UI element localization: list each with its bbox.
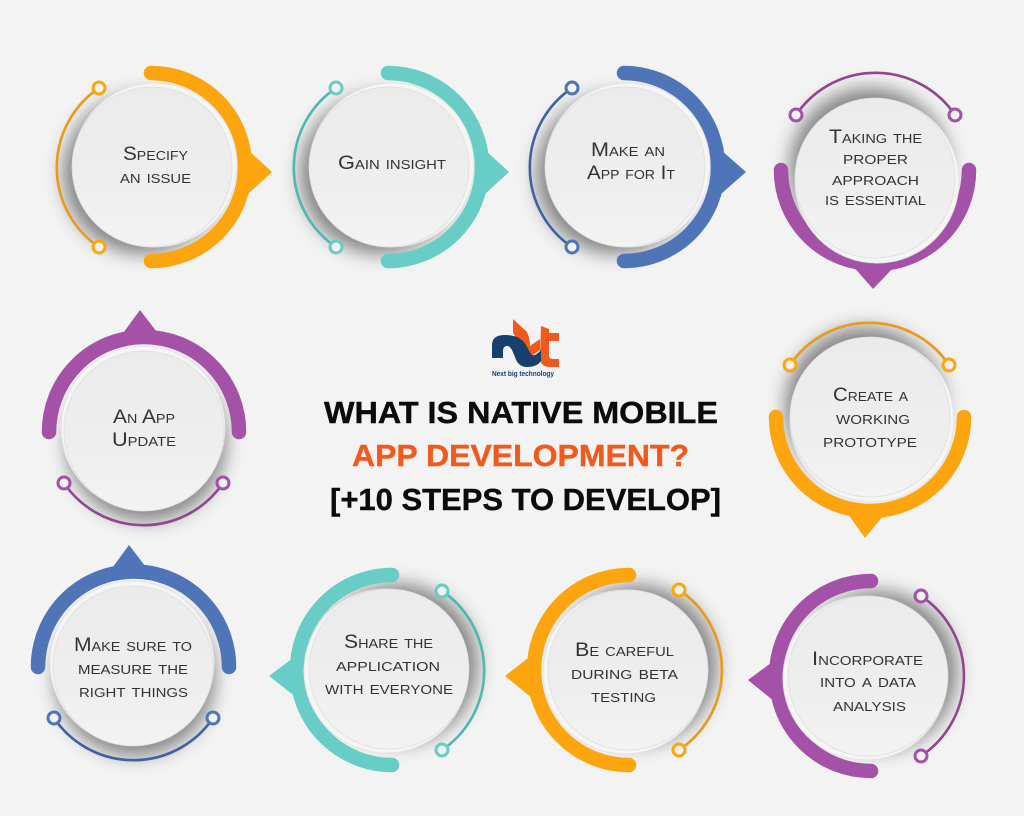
step 2: gain insight	[294, 73, 509, 261]
step 1: specify an issue	[57, 73, 272, 261]
step 7: be careful during beta testing	[505, 575, 722, 765]
step 9: make sure to measure the right things: measure the	[78, 658, 188, 679]
step 8: share the application with everyone: with everyone	[325, 678, 453, 699]
step 10: an app update: An App	[113, 407, 175, 428]
step 6: incorporate into a data analysis	[748, 581, 964, 771]
step 3: make an app for it: App for It	[587, 163, 675, 184]
step 6: incorporate into a data analysis: into a data	[820, 671, 916, 692]
step 1: specify an issue: an issue	[120, 167, 191, 188]
step 9: make sure to measure the right things: right things	[79, 681, 188, 702]
step 6: incorporate into a data analysis: Incorporate	[812, 649, 923, 670]
step 1: specify an issue: Specify	[123, 144, 188, 165]
step 7: be careful during beta testing: Be careful	[575, 640, 674, 661]
step 5: create a working prototype: prototype	[823, 431, 917, 452]
title	[324, 395, 721, 517]
step 3: make an app for it: Make an	[591, 140, 665, 161]
step 5: create a working prototype: working	[836, 408, 910, 429]
step 10: an app update	[49, 310, 239, 525]
step 4: taking the proper approach: is essential	[825, 189, 926, 210]
title: [+10 STEPS TO DEVELOP]	[330, 482, 721, 517]
logo: next big technology	[492, 319, 559, 378]
step 4: taking the proper approach: proper	[843, 148, 908, 169]
step 4: taking the proper approach: approach	[832, 169, 919, 190]
step 2: gain insight: Gain insight	[338, 153, 446, 174]
step 3: make an app for it	[530, 73, 746, 261]
step 9: make sure to measure the right things	[38, 545, 229, 760]
step 4: taking the proper approach	[781, 73, 969, 289]
step 7: be careful during beta testing: during beta	[571, 663, 678, 684]
step 8: share the application with everyone: application	[336, 655, 440, 676]
step 9: make sure to measure the right things: Make sure to	[74, 635, 192, 656]
step 5: create a working prototype: Create a	[833, 385, 908, 406]
step 7: be careful during beta testing: testing	[591, 686, 656, 707]
title: APP DEVELOPMENT?	[352, 438, 689, 473]
step 8: share the application with everyone	[269, 575, 484, 765]
title: WHAT IS NATIVE MOBILE	[324, 395, 718, 430]
logo: next big technology: Next big technology	[492, 369, 555, 378]
step 5: create a working prototype	[776, 323, 964, 538]
step 8: share the application with everyone: Share the	[344, 632, 433, 653]
step 6: incorporate into a data analysis: analysis	[833, 695, 906, 716]
step 4: taking the proper approach: Taking the	[829, 127, 922, 148]
step 10: an app update: Update	[112, 430, 176, 451]
